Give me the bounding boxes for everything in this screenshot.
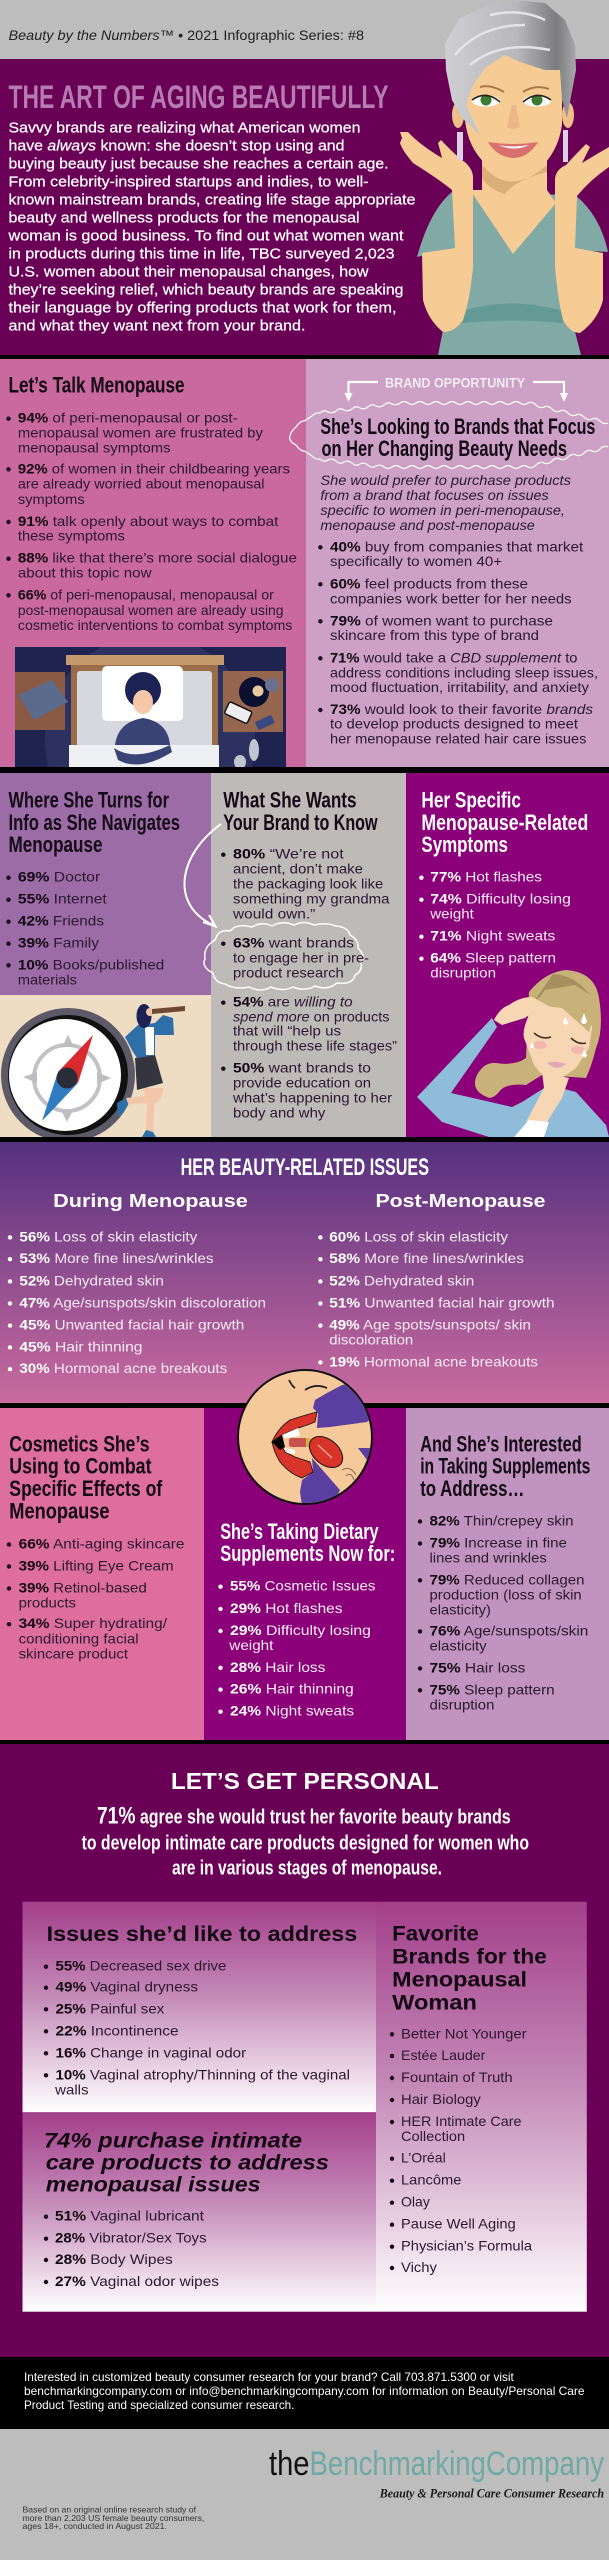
contact text [24, 2370, 585, 2412]
brands list: Physician’s Formula [401, 2238, 532, 2254]
supplements list [218, 1578, 376, 1719]
wavy outline [290, 402, 608, 468]
post-menopause list [318, 1228, 555, 1369]
issues list: 16% Change in vaginal odor [56, 2044, 247, 2060]
black background [0, 2357, 609, 2429]
post-menopause list: 19% Hormonal acne breakouts [329, 1353, 538, 1369]
heading: care products to address [46, 2151, 329, 2174]
menopause statistics list [6, 410, 297, 633]
intro paragraph: buying beauty just because she reaches a certain age. [8, 156, 388, 173]
heading: Symptoms [421, 832, 508, 857]
symptoms list [419, 869, 571, 981]
issues list: 25% Painful sex [56, 2000, 164, 2016]
cream background [0, 995, 211, 1137]
contact text: benchmarkingcompany.com or info@benchmarkingcompany.com for information on Beauty/Personal Care [24, 2384, 585, 2398]
trust statement: 71% agree she would trust her favorite beauty brands [97, 1802, 511, 1829]
subheading: during menopause: During Menopause [53, 1191, 248, 1211]
info sources list: 10% Books/published [18, 956, 164, 972]
brand wishes list: ancient, don’t make [233, 861, 363, 877]
heading: Menopausal [392, 1969, 527, 1992]
heading: Menopause [8, 832, 102, 857]
cosmetics list: 39% Lifting Eye Cream [19, 1557, 174, 1573]
panel: intro [0, 0, 609, 355]
title: THE ART OF AGING BEAUTIFULLY [8, 79, 388, 115]
during menopause list: 30% Hormonal acne breakouts [19, 1360, 227, 1376]
info sources list: 55% Internet [18, 891, 107, 907]
heading: Woman [392, 1991, 477, 2014]
supplements interest list: 79% Increase in fine [430, 1534, 567, 1550]
heading: She’s Taking Dietary [220, 1519, 379, 1544]
brand wishes list: to engage her in pre- [233, 950, 369, 966]
brands list: Vichy [401, 2259, 437, 2275]
info sources list: 39% Family [18, 935, 99, 951]
menopause statistics list: about this topic now [18, 565, 152, 581]
issues list: walls [54, 2081, 88, 2097]
menopause statistics list: post-menopausal women are already using [18, 602, 284, 618]
heading: Let’s Talk Menopause [8, 373, 184, 398]
lilac background [406, 1408, 609, 1740]
divider band [0, 1137, 609, 1142]
intro paragraph: From celebrity-inspired startups and indies, to well- [8, 174, 369, 190]
heading [392, 1923, 547, 2014]
supplements interest list: 76% Age/sunspots/skin [430, 1622, 588, 1638]
menopause statistics list: menopausal women are frustrated by [18, 424, 263, 440]
brand wishes list: spend more on products [233, 1009, 390, 1025]
post-menopause list: 60% Loss of skin elasticity [329, 1228, 508, 1244]
supplements list: weight [228, 1637, 274, 1653]
opportunity statistics list: skincare from this type of brand [330, 627, 539, 643]
supplements list: 29% Hot flashes [230, 1600, 342, 1616]
during menopause list: 45% Unwanted facial hair growth [19, 1317, 244, 1333]
panel: where she turns for info [0, 773, 211, 1142]
supplements list: 55% Cosmetic Issues [230, 1578, 376, 1594]
brand opportunity label: BRAND OPPORTUNITY [385, 375, 525, 390]
panel: beauty-related issues [0, 1142, 609, 1403]
cosmetics list: 66% Anti-aging skincare [19, 1536, 185, 1552]
during menopause list [8, 1228, 266, 1376]
symptoms list: 71% Night sweats [430, 928, 555, 944]
intro paragraph: in products during this time in life, TBC surveyed 2,023 [8, 246, 394, 262]
intro paragraph: they’re seeking relief, which beauty brands are speaking [8, 282, 404, 298]
supplements interest list: elasticity) [430, 1601, 491, 1617]
opportunity statistics list: her menopause related hair care issues [330, 730, 586, 746]
panel: cosmetics [0, 1408, 204, 1740]
brand wishes list: product research [233, 965, 344, 981]
opportunity statistics list: specifically to women 40+ [330, 553, 502, 569]
panel: what she wants your brand to know [184, 773, 406, 1137]
menopause statistics list: 92% of women in their childbearing years [18, 460, 290, 476]
brand wishes list: through these life stages” [233, 1038, 397, 1054]
brand wishes list: 54% are willing to [233, 994, 353, 1010]
panel: call to action footer [0, 2357, 609, 2429]
menopause statistics list: cosmetic interventions to combat symptoms [18, 617, 292, 633]
arrow: curved white [184, 824, 221, 926]
info sources list: 69% Doctor [18, 869, 101, 885]
purchases list: 27% Vaginal odor wipes [55, 2273, 219, 2289]
illustration: lips taking a pill [238, 1370, 380, 1510]
menopause statistics list: menopausal symptoms [18, 440, 171, 456]
brands list [390, 2025, 532, 2275]
heading: Cosmetics She’s [9, 1431, 149, 1456]
grey background [211, 773, 406, 1137]
symptoms list: weight [429, 906, 474, 922]
cosmetics list: 39% Retinol-based [19, 1580, 147, 1596]
heading [220, 1519, 395, 1566]
info sources list [6, 869, 164, 987]
heading [44, 2129, 329, 2196]
supplements interest list: 75% Sleep pattern [430, 1681, 555, 1697]
brand wishes list: the packaging look like [233, 876, 384, 892]
during menopause list: 56% Loss of skin elasticity [19, 1228, 197, 1244]
cosmetics list: skincare product [19, 1646, 128, 1662]
cosmetics list: conditioning facial [19, 1631, 139, 1647]
purple background [406, 773, 609, 1137]
heading: Brands for the [392, 1946, 547, 1969]
supplements list: 28% Hair loss [230, 1659, 325, 1675]
panel: let's get personal [0, 1744, 609, 2357]
gradient background [22, 1902, 376, 2112]
issues list: 22% Incontinence [56, 2022, 179, 2038]
italic intro: from a brand that focuses on issues [320, 487, 549, 503]
heading: Your Brand to Know [223, 810, 378, 835]
heading: Info as She Navigates [8, 810, 180, 835]
brands list: Lancôme [401, 2172, 462, 2188]
heading: Where She Turns for [8, 788, 169, 813]
heading [320, 414, 595, 461]
brands list: Better Not Younger [401, 2025, 527, 2041]
italic intro: specific to women in peri-menopause, [320, 502, 565, 518]
source note: ages 18+, conducted in August 2021. [22, 2521, 167, 2531]
menopause statistics list: these symptoms [18, 528, 125, 544]
opportunity statistics list: address conditions including sleep issues, [330, 664, 598, 680]
source note: more than 2,203 US female beauty consumers, [22, 2513, 204, 2523]
symptoms list: disruption [430, 965, 496, 981]
supplements interest list: 82% Thin/crepey skin [430, 1512, 574, 1528]
intro paragraph: U.S. women about their menopausal changes, how [8, 264, 369, 280]
post-menopause list: 52% Dehydrated skin [329, 1272, 474, 1288]
post-menopause list: 49% Age spots/sunspots/ skin [329, 1317, 531, 1333]
supplements interest list: 75% Hair loss [430, 1660, 525, 1676]
section heading: HER BEAUTY-RELATED ISSUES [181, 1154, 429, 1181]
post-menopause list: 51% Unwanted facial hair growth [329, 1294, 555, 1310]
symptoms list: 64% Sleep pattern [430, 950, 556, 966]
arrow: left bracket [344, 382, 378, 402]
brand wishes list: 50% want brands to [233, 1060, 371, 1076]
intro paragraph: woman is good business. To find out what women want [7, 228, 404, 244]
intro paragraph: and what they want next from your brand. [8, 318, 306, 334]
issues list: 10% Vaginal atrophy/Thinning of the vaginal [56, 2066, 350, 2082]
cloud highlight [204, 922, 363, 990]
supplements list: 29% Difficulty losing [230, 1622, 371, 1638]
brand wishes list: that will “help us [233, 1023, 341, 1039]
source note: Based on an original online research study of [22, 2504, 197, 2514]
supplements interest list: elasticity [430, 1638, 487, 1654]
supplements interest list [418, 1512, 588, 1713]
panel: let's talk menopause [0, 359, 306, 767]
brand wishes list [221, 846, 397, 1121]
intro paragraph: known mainstream brands, creating life stage appropriate [8, 192, 416, 208]
opportunity statistics list [318, 538, 598, 746]
source note [22, 2504, 204, 2531]
supplements interest list: disruption [430, 1697, 494, 1713]
purchases list: 51% Vaginal lubricant [55, 2208, 204, 2224]
heading: Using to Combat [9, 1454, 152, 1479]
heading: 74% purchase intimate [44, 2129, 302, 2152]
intro paragraph: beauty and wellness products for the menopausal [8, 210, 360, 226]
opportunity statistics list: mood fluctuation, irritability, and anxiety [330, 679, 589, 695]
illustration: smiling silver-haired woman [400, 0, 609, 355]
opportunity statistics list: 60% feel products from these [330, 575, 528, 591]
illustration: compass and woman with telescope [1, 1004, 185, 1142]
menopause statistics list: symptoms [18, 491, 85, 507]
info sources list: materials [18, 971, 77, 987]
issues list: 55% Decreased sex drive [56, 1958, 227, 1974]
supplements list: 24% Night sweats [230, 1703, 354, 1719]
heading: Supplements Now for: [220, 1541, 395, 1566]
heading: Specific Effects of [9, 1476, 163, 1501]
panel: specific symptoms [406, 773, 609, 1137]
brand wishes list: provide education on [233, 1075, 371, 1091]
during menopause list: 45% Hair thinning [19, 1338, 142, 1354]
heading: menopausal issues [46, 2173, 261, 2196]
supplements interest list: production (loss of skin [430, 1586, 582, 1602]
subheading: post-menopause: Post-Menopause [376, 1191, 546, 1211]
heading [421, 788, 588, 857]
brands list: Collection [401, 2128, 465, 2144]
heading: What She Wants [223, 788, 356, 813]
brand wishes list: 80% “We’re not [233, 846, 344, 862]
opportunity statistics list: 79% of women want to purchase [330, 612, 553, 628]
heading: to Address… [420, 1476, 524, 1501]
post-menopause list: 58% More fine lines/wrinkles [329, 1250, 524, 1266]
supplements list: 26% Hair thinning [230, 1681, 354, 1697]
opportunity statistics list: 73% would look to their favorite brands [330, 701, 593, 717]
purchases list: 28% Body Wipes [55, 2251, 173, 2267]
divider band [0, 767, 609, 773]
during menopause list: 52% Dehydrated skin [19, 1272, 164, 1288]
intro background [0, 59, 609, 355]
intro paragraph: have always known: she doesn’t stop using and [8, 138, 344, 155]
menopause statistics list: 94% of peri-menopausal or post- [18, 410, 238, 426]
purchases list: 28% Vibrator/Sex Toys [55, 2230, 207, 2246]
arrow: right bracket [533, 382, 568, 402]
illustration: woman with headache [417, 970, 609, 1137]
dark purple background [0, 1744, 609, 2357]
divider band [0, 1740, 609, 1744]
heading: Menopause [9, 1499, 109, 1524]
brand wishes list: what’s happening to her [232, 1090, 393, 1106]
menopause statistics list: are already worried about menopausal [18, 476, 265, 492]
menopause statistics list: 88% like that there’s more social dialogue [18, 550, 297, 566]
cosmetics list [7, 1536, 185, 1662]
supplements interest list: lines and wrinkles [430, 1550, 547, 1566]
opportunity statistics list: 71% would take a CBD supplement to [330, 649, 578, 665]
pink background [0, 359, 306, 767]
panel: brand opportunity [290, 359, 609, 767]
section heading: LET’S GET PERSONAL [171, 1768, 439, 1794]
purchases list [44, 2208, 219, 2289]
trust statement [82, 1802, 529, 1880]
gradient background [376, 1902, 587, 2312]
heading: Favorite [392, 1923, 479, 1946]
issues list [44, 1958, 350, 2097]
opportunity statistics list: to develop products designed to meet [330, 716, 578, 732]
pink background [0, 1408, 204, 1740]
panel: dietary supplements [204, 1408, 406, 1740]
heading [8, 788, 180, 857]
contact text: Interested in customized beauty consumer research for your brand? Call 703.871.5300 or visit [24, 2370, 514, 2384]
brands list: Pause Well Aging [401, 2216, 516, 2232]
brands list: HER Intimate Care [401, 2113, 522, 2129]
intro paragraph: their language by offering products that work for them, [8, 300, 396, 316]
during menopause list: 53% More fine lines/wrinkles [19, 1250, 214, 1266]
purple background [204, 1408, 406, 1740]
panel: issues she'd like to address [22, 1902, 376, 2112]
divider band [0, 1403, 609, 1408]
opportunity statistics list: 40% buy from companies that market [330, 538, 583, 554]
heading [420, 1431, 590, 1501]
lilac background [306, 359, 609, 767]
brand wishes list: something my grandma [233, 891, 390, 907]
heading [9, 1431, 163, 1524]
brands list: Estée Lauder [401, 2047, 486, 2063]
info sources list: 42% Friends [18, 913, 104, 929]
during menopause list: 47% Age/sunspots/skin discoloration [19, 1294, 266, 1310]
lilac background [0, 773, 211, 995]
italic intro: She would prefer to purchase products [320, 472, 571, 488]
panel: favorite brands [376, 1902, 587, 2312]
panel: intimate care purchases [22, 2112, 376, 2312]
heading: Her Specific [421, 788, 521, 813]
brands list: L’Oréal [401, 2150, 446, 2166]
symptoms list: 74% Difficulty losing [430, 891, 571, 907]
brand wishes list: body and why [233, 1105, 325, 1121]
brands list: Fountain of Truth [401, 2069, 513, 2085]
issues list: 49% Vaginal dryness [56, 1979, 198, 1995]
brand wishes list: would own.” [232, 906, 316, 922]
divider band [0, 355, 609, 359]
trust statement: are in various stages of menopause. [172, 1858, 442, 1880]
logo: the Benchmarking Company: the [269, 2445, 310, 2483]
heading [223, 788, 378, 835]
brands list: Olay [401, 2194, 430, 2210]
supplements interest list: 79% Reduced collagen [430, 1571, 584, 1587]
opportunity statistics list: companies work better for her needs [330, 590, 572, 606]
menopause statistics list: 91% talk openly about ways to combat [18, 513, 279, 529]
post-menopause list: discoloration [329, 1331, 413, 1347]
italic intro [320, 472, 571, 533]
gradient background [0, 1142, 609, 1403]
brands list: Hair Biology [401, 2091, 481, 2107]
contact text: Product Testing and specialized consumer research. [24, 2398, 294, 2412]
italic intro: menopause and post-menopause [320, 517, 535, 533]
cosmetics list: 34% Super hydrating/ [19, 1615, 167, 1631]
heading: Issues she’d like to address [47, 1923, 357, 1946]
cosmetics list: products [19, 1594, 76, 1610]
gradient background [22, 2112, 376, 2312]
intro paragraph [7, 120, 415, 334]
intro paragraph: Savvy brands are realizing what American women [8, 120, 361, 137]
symptoms list: 77% Hot flashes [430, 869, 542, 885]
brand wishes list: 63% want brands [233, 935, 354, 951]
menopause statistics list: 66% of peri-menopausal, menopausal or [18, 586, 274, 602]
illustration: woman awake in bed [15, 647, 286, 767]
series label: Beauty by the Numbers™ • 2021 Infographic Series: #8 [8, 27, 364, 43]
panel: interested in supplements [406, 1408, 609, 1740]
